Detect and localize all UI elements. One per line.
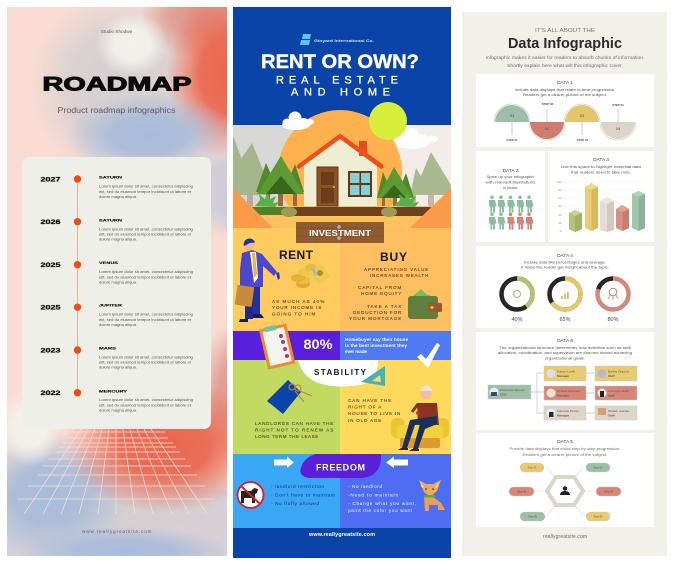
panel: data 1: Include data displays that relate to time progression. <box>514 88 616 92</box>
panel: data 1: Readers get a clearer picture of the subject. <box>523 93 607 97</box>
faded trees right <box>410 152 451 206</box>
background <box>462 12 667 556</box>
rent freedom list <box>271 484 335 506</box>
right of house text: RIGHT OF A <box>348 404 382 410</box>
step 02: STEP 02 <box>542 102 554 106</box>
manager box 3: Hannah Porter <box>557 409 579 413</box>
heading: Infographic makes it easier for readers to absorb chunks of information. <box>486 55 644 60</box>
panel: data 5 <box>476 433 654 527</box>
panel: data 1: DATA 1 <box>557 80 573 86</box>
website: www.reallygreatsite.com <box>308 532 375 538</box>
header background <box>233 7 451 125</box>
freedom section background <box>233 454 451 528</box>
3D bar chart: 40 <box>558 206 562 208</box>
timeline entry 2026 <box>40 218 193 242</box>
manager box 3 <box>544 406 586 420</box>
green trees right <box>377 167 414 206</box>
timeline entry 2027 <box>40 175 193 199</box>
rent freedom list: - Don't have to maintain <box>271 492 335 498</box>
manager box 3: Manager <box>557 414 570 418</box>
freedom heading: FREEDOM <box>316 462 365 472</box>
buy heading: BUY <box>380 250 407 264</box>
cloud right <box>395 128 438 149</box>
stat caption: ever made <box>345 349 367 354</box>
footer band <box>233 528 451 558</box>
panel: rent or own poster <box>233 7 451 558</box>
step 04: STEP 04 <box>612 103 624 107</box>
step 01: 01 <box>510 113 515 118</box>
timeline entry 2022: MERCURY <box>99 389 128 393</box>
hexagon centre <box>547 477 583 505</box>
rent freedom list: - landlord restriction <box>271 484 324 489</box>
icon: house with keys <box>267 380 312 414</box>
rent text: AS MUCH AS 40% <box>272 299 325 304</box>
donut 65% <box>550 278 580 323</box>
timeline entry 2023 <box>40 346 193 370</box>
icon: wallet <box>408 289 442 319</box>
panel: data 5: Provide data displays that show step-by-step progression. <box>510 447 620 451</box>
buy text: INCREASES WEALTH <box>370 273 429 278</box>
timeline entry 2027: SATURN <box>99 176 123 180</box>
rent heading: RENT <box>279 248 314 262</box>
step 01: STEP 01 <box>506 138 518 142</box>
arrow right <box>274 456 294 468</box>
main title: RENT OR OWN? <box>261 51 419 73</box>
company name: Studio Shodwe <box>101 29 133 34</box>
3D bar chart: 100 <box>557 182 562 184</box>
orange corner triangles <box>233 188 451 228</box>
timeline entry 2027: dolore magna aliqua. <box>99 195 137 199</box>
title: ROADMAP <box>42 74 192 96</box>
timeline entry 2025 <box>40 261 193 284</box>
step 03 <box>564 104 600 142</box>
timeline entry 2022: dolore magna aliqua. <box>99 408 137 412</box>
step pill bottom right <box>586 512 610 521</box>
stat caption: Homebuyer say their house <box>345 337 408 342</box>
timeline entry 2025: 2025 <box>40 263 61 269</box>
buy text: HOME EQUITY <box>361 291 402 296</box>
panel: data 6 <box>476 332 654 430</box>
investment section background <box>233 228 451 331</box>
panel: data 6: organizational goals. <box>545 356 585 360</box>
donut 40% <box>502 278 532 323</box>
right of house text: CAN HAVE THE <box>348 398 392 403</box>
website: reallygreatsite.com <box>543 534 587 540</box>
stat caption <box>345 337 408 354</box>
panel: data 2: Spice up your infographic <box>486 175 535 179</box>
step pill bottom right: Step 04 <box>594 514 603 518</box>
step pill top right: Step 02 <box>594 466 603 470</box>
ground <box>233 206 451 231</box>
stat caption: is the best investment they <box>345 343 407 348</box>
timeline entry 2025: Lorem ipsum dolor sit amet, consectetur adipiscing <box>99 270 193 274</box>
timeline entry 2025 second: dolore magna aliqua. <box>99 323 137 327</box>
lime sun <box>369 102 407 140</box>
icon: check mark <box>417 343 440 368</box>
timeline line <box>76 179 78 393</box>
org chart connectors <box>531 373 595 413</box>
buy freedom list: paint the color you want <box>348 508 413 513</box>
manager box 2: Manager <box>557 394 570 398</box>
step pill middle left: Step 06 <box>517 490 527 494</box>
timeline entry 2026: SATURN <box>99 218 123 222</box>
panel: roadmap poster <box>7 7 227 556</box>
timeline entry 2026: elit, sed do eiusmod tempor incididunt ut labore et <box>99 233 191 237</box>
company logo <box>300 34 374 45</box>
staff box 3 <box>595 406 637 420</box>
panel: data 6: The organizational structure determines how activities such as task <box>499 346 631 350</box>
green trees left <box>256 156 304 206</box>
buy freedom list: - No landlord <box>348 484 382 489</box>
subtitle <box>276 74 398 98</box>
heading: IT'S ALL ABOUT THE <box>535 28 595 34</box>
ceo box <box>488 385 531 399</box>
timeline entry 2023: 2023 <box>40 349 61 355</box>
freedom pill <box>300 454 381 478</box>
staff box 1: Bailey Dupont <box>608 370 629 374</box>
timeline entry 2025 second: elit, sed do eiusmod tempor incididunt ut labore et <box>99 318 191 322</box>
donut 80%: 80% <box>607 317 619 323</box>
panel: data 2: or photos. <box>503 186 518 190</box>
timeline entry 2025: dolore magna aliqua. <box>99 280 137 284</box>
heading <box>486 28 644 68</box>
stat 80%: 80% <box>304 336 333 352</box>
landlords text: LANDLORDS CAN HAVE THE <box>255 421 334 426</box>
timeline entry 2027: Lorem ipsum dolor sit amet, consectetur adipiscing <box>99 185 193 189</box>
timeline entry 2025 second: Lorem ipsum dolor sit amet, consectetur adipiscing <box>99 313 193 317</box>
buy text: TAKE A TAX <box>367 304 402 309</box>
staff box 2: Cahaya Hadid <box>608 389 629 393</box>
arrow left <box>386 456 408 468</box>
buy text: YOUR MORTGAGE <box>349 316 402 321</box>
step pill bottom left: Step 05 <box>528 514 538 518</box>
timeline entry 2023: elit, sed do eiusmod tempor incididunt ut labore et <box>99 361 191 365</box>
timeline entry 2022: elit, sed do eiusmod tempor incididunt ut labore et <box>99 403 191 407</box>
buy freedom list: - Change what you want, <box>348 501 416 506</box>
step 02: 02 <box>545 126 550 131</box>
panel: data 1 <box>476 74 654 147</box>
timeline entry 2023: dolore magna aliqua. <box>99 366 137 370</box>
step pill top right <box>586 463 610 472</box>
timeline entry 2022: Lorem ipsum dolor sit amet, consectetur adipiscing <box>99 398 193 402</box>
step 03: STEP 03 <box>577 138 589 142</box>
buy freedom list: -Need to maintain <box>348 492 398 498</box>
investment sign: INVESTMENT <box>309 228 372 238</box>
heading: Shortly explain here what will this infographic cover. <box>507 63 623 68</box>
buy text: CAPITAL FROM <box>358 285 402 290</box>
icon: businessman <box>235 238 280 322</box>
people pictogram <box>489 196 534 230</box>
panel: data 3: Use this space to highlight essential data <box>561 165 641 169</box>
3D bar chart: 80 <box>558 190 562 192</box>
3D bar chart: 10 <box>558 223 562 225</box>
right of house text: HOUSE TO LIVE IN <box>348 411 401 416</box>
panel: data 3: that readers need to take note. <box>571 170 631 174</box>
subtitle: REAL ESTATE <box>276 74 398 86</box>
website: www.reallygreatsite.com <box>82 529 152 534</box>
buy text: DEDUCTION FOR <box>353 310 402 315</box>
timeline entry 2022 <box>40 389 193 412</box>
step 01 <box>494 104 530 142</box>
step connector lines <box>512 109 618 135</box>
landlords text: RIGHT NOT TO RENEW AS <box>255 428 334 432</box>
ceo box: Francois Mercer <box>500 388 525 392</box>
timeline entry 2027: elit, sed do eiusmod tempor incididunt ut labore et <box>99 190 191 194</box>
timeline entry 2027: 2027 <box>40 177 61 183</box>
cloud left <box>282 112 314 130</box>
landlords text: LONG TERM THE LEASE <box>255 434 319 439</box>
rent text <box>272 299 325 316</box>
gradient background <box>7 7 227 556</box>
icon: old man in armchair <box>391 386 449 451</box>
step 04: 04 <box>616 126 621 131</box>
right of house text <box>348 398 401 423</box>
manager box 1: Manager <box>557 374 570 378</box>
step 02 <box>529 102 565 140</box>
donut 80% <box>598 278 628 323</box>
timeline entry 2025: elit, sed do eiusmod tempor incididunt ut labore et <box>99 275 191 279</box>
house <box>296 134 384 206</box>
manager box 2: Rufus Stewart <box>557 389 580 393</box>
panel: data 4: Include data like percentages and average. <box>524 260 606 264</box>
step 04 <box>600 103 636 140</box>
bushes <box>255 193 419 217</box>
timeline entry 2025 second: 2025 <box>40 306 61 312</box>
company logo: Ginyard International Co. <box>314 38 374 43</box>
timeline entry 2026: Lorem ipsum dolor sit amet, consectetur adipiscing <box>99 227 193 231</box>
panel: data 3 <box>548 151 654 242</box>
staff box 1 <box>595 366 637 381</box>
manager box 1 <box>544 366 586 381</box>
3D bar chart: 60 <box>558 198 562 200</box>
timeline entry 2026: 2026 <box>40 220 61 226</box>
step pill top left <box>520 463 544 472</box>
panel: data 4 <box>476 246 654 328</box>
panel: data 5: Readers get a clearer picture of the subject. <box>522 453 608 457</box>
step pill middle left <box>509 487 534 496</box>
timeline entry 2025: VENUS <box>99 261 119 265</box>
faded trees left <box>233 135 272 206</box>
icon: ruler triangle <box>361 366 385 386</box>
icon: chihuahua <box>419 480 445 511</box>
stability shape <box>298 360 378 386</box>
panel: data 3: DATA 3 <box>593 157 609 163</box>
donut 40%: 40% <box>511 317 523 323</box>
rent text: YOUR INCOME IS <box>272 305 322 310</box>
panel: data 5: DATA 5 <box>557 439 573 445</box>
heading: Data Infographic <box>508 35 622 52</box>
setting sun <box>278 110 402 234</box>
3D bar chart <box>557 182 645 233</box>
staff box 2: Staff <box>608 394 615 398</box>
panel: data infographic poster <box>462 12 667 556</box>
staff box 2 <box>595 386 637 400</box>
icon: no dog sign <box>238 482 264 508</box>
panel: data 2: DATA 2 <box>503 168 519 174</box>
staff box 3: Staff <box>608 414 615 418</box>
investment sign <box>296 222 384 243</box>
stability section background <box>233 360 451 454</box>
connectors <box>537 468 593 515</box>
step pill middle right <box>596 487 621 496</box>
subtitle: AND HOME <box>291 86 390 98</box>
staff box 1: Staff <box>608 374 615 378</box>
panel: data 2 <box>476 151 545 242</box>
staff box 3: Shawn Garcia <box>608 409 629 413</box>
perspective grid <box>17 429 215 514</box>
icon: clipboard <box>259 323 295 370</box>
panel: data 2: with relevant illustrations <box>486 180 536 184</box>
3D bar chart: 0 <box>560 231 562 233</box>
manager box 1: Aaron Loeb <box>557 370 575 374</box>
panel: timeline card <box>22 157 211 429</box>
rent text: GOING TO HIM <box>272 312 316 316</box>
icon: gold coins <box>291 264 331 288</box>
sky <box>233 125 451 215</box>
donut 65%: 65% <box>559 317 571 323</box>
timeline entry 2025 second <box>40 304 193 327</box>
step pill top left: Step 01 <box>528 466 537 470</box>
panel: data 6: allocation, coordination, and supervision are directed toward achieving <box>498 351 632 355</box>
timeline entry 2025 second: JUPITER <box>99 304 123 308</box>
buy text: APPRECIATING VALUE <box>364 267 429 272</box>
landlords text <box>255 421 334 439</box>
ceo box: CEO <box>500 392 507 396</box>
manager box 2 <box>544 386 586 400</box>
panel: data 4: It helps the reader get insight about the topic. <box>521 266 609 270</box>
buy freedom list <box>348 484 416 513</box>
timeline entry 2023: MARS <box>99 346 117 350</box>
buy text <box>349 267 429 321</box>
rent freedom list: - No fluffy allowed <box>271 501 319 506</box>
step 03: 03 <box>580 113 585 118</box>
stability heading: STABILITY <box>314 368 367 377</box>
step pill middle right: Step 03 <box>604 490 614 494</box>
panel: data 4: DATA 4 <box>557 253 573 259</box>
3D bar chart: 20 <box>558 215 562 217</box>
step pill bottom left <box>520 512 545 521</box>
stat banner <box>233 323 451 370</box>
timeline entry 2022: 2022 <box>40 391 61 397</box>
panel: data 6: DATA 6 <box>557 338 573 344</box>
timeline entry 2023: Lorem ipsum dolor sit amet, consectetur adipiscing <box>99 355 193 359</box>
right of house text: IN OLD AGE <box>348 418 382 423</box>
timeline entry 2026: dolore magna aliqua. <box>99 238 137 242</box>
subtitle: Product roadmap infographics <box>58 106 176 115</box>
